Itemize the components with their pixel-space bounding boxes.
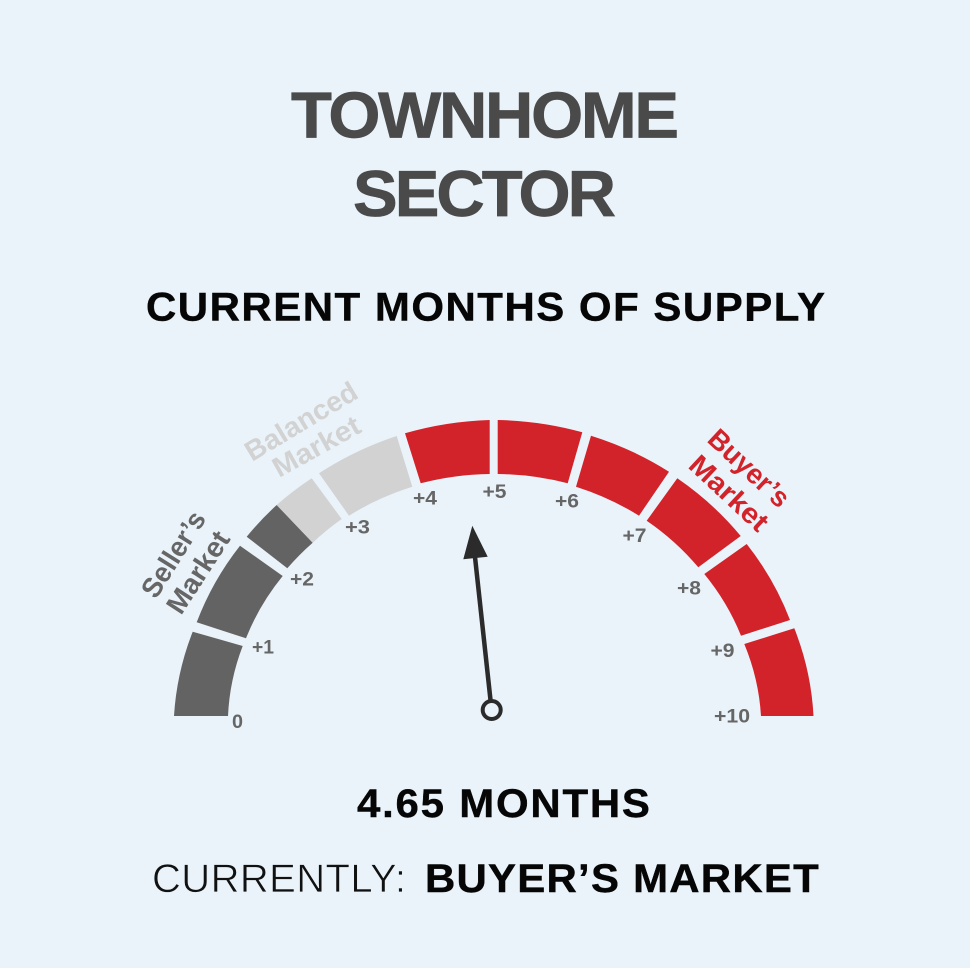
- tick labels: +10: [714, 706, 750, 728]
- label: seller's market: [135, 505, 236, 619]
- tick labels: +6: [555, 490, 579, 512]
- segments: balanced market: [277, 436, 412, 543]
- tick labels: +7: [622, 525, 646, 547]
- segments: seller's market: [174, 505, 313, 716]
- tick labels: 0: [232, 711, 243, 733]
- title: TOWNHOME: [291, 78, 679, 151]
- tick labels: +3: [345, 516, 370, 538]
- tick labels: +5: [482, 481, 507, 503]
- title: [291, 78, 679, 230]
- status line: [152, 856, 819, 901]
- label: balanced market: Market: [267, 410, 366, 483]
- tick labels: +4: [413, 488, 437, 510]
- status line: CURRENTLY:: [152, 857, 406, 901]
- gauge: [135, 376, 813, 733]
- tick labels: [232, 481, 750, 733]
- tick labels: +9: [710, 640, 735, 662]
- needle: [463, 526, 501, 719]
- tick labels: +1: [252, 636, 274, 658]
- label: seller's market: Seller’s: [135, 505, 212, 603]
- value: months: 4.65 MONTHS: [357, 781, 650, 826]
- label: buyer's market: Buyer’s: [702, 423, 796, 514]
- label: balanced market: Balanced: [239, 376, 363, 467]
- title: SECTOR: [353, 157, 616, 230]
- segments: buyer's market: [405, 420, 814, 716]
- status line: BUYER’S MARKET: [425, 856, 819, 901]
- label: buyer's market: Market: [683, 449, 775, 538]
- label: buyer's market: [683, 423, 796, 538]
- label: seller's market: Market: [160, 525, 236, 619]
- heading: current months of supply: CURRENT MONTHS OF SUPPLY: [146, 284, 825, 329]
- tick labels: +2: [290, 568, 314, 590]
- tick labels: +8: [677, 578, 701, 600]
